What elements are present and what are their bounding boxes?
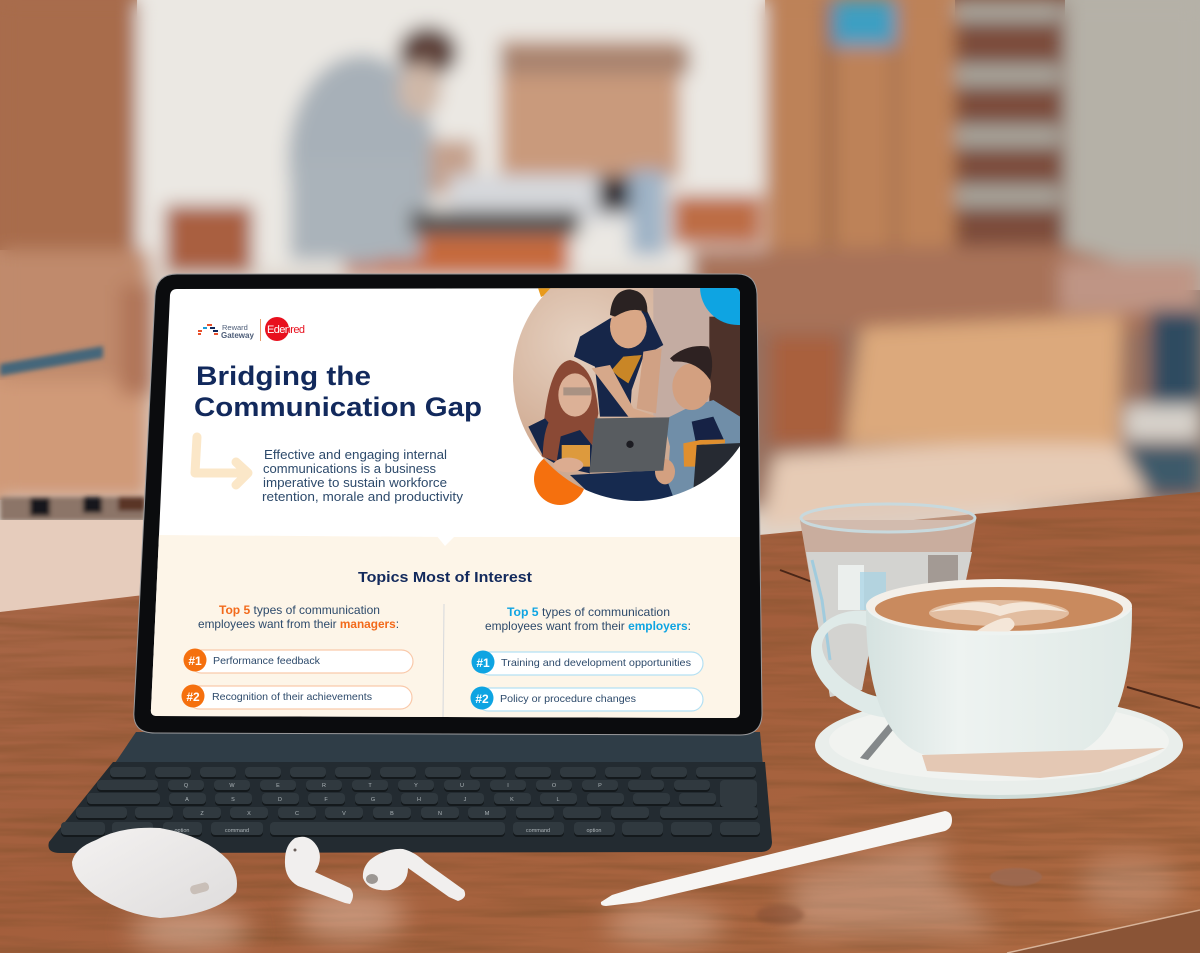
keys: Y: [414, 783, 418, 789]
intro text: [262, 447, 464, 504]
coffee cup: [811, 579, 1132, 760]
cup handle: [811, 611, 892, 718]
keys: E: [276, 783, 280, 789]
keys: X: [247, 811, 251, 817]
cup front lip: [866, 606, 1132, 635]
title: Bridging the: [196, 361, 371, 391]
logo: Reward Gateway and Edenred: [198, 317, 305, 341]
keys: H: [417, 797, 421, 803]
airpods case: [72, 828, 237, 918]
keys: K: [510, 797, 514, 803]
divider: [443, 604, 444, 718]
keys: command: [225, 828, 249, 834]
keys: option: [586, 828, 602, 834]
background: blurred cafe interior: [0, 0, 1200, 640]
keys: U: [460, 783, 464, 789]
cup body: [866, 608, 1132, 760]
photo of three colleagues in circle: [510, 287, 750, 507]
keys: R: [322, 783, 326, 789]
logo: Reward Gateway and Edenred: Edenred: [267, 324, 305, 336]
right column intro: Top 5 types of communication: [507, 605, 670, 619]
manager item 1: [184, 648, 413, 673]
spoon: [860, 720, 898, 760]
manager item 1: #1: [188, 654, 202, 668]
keys: option: [174, 828, 190, 834]
keys: G: [371, 797, 375, 803]
orange circle: [534, 458, 584, 505]
title: [194, 361, 482, 422]
intro text: retention, morale and productivity: [262, 489, 464, 504]
keys: Q: [184, 783, 189, 789]
keys: W: [229, 783, 235, 789]
right earbud: [363, 849, 465, 901]
right column intro: employees want from their employers:: [485, 619, 691, 633]
arrow: [195, 437, 248, 485]
title: Communication Gap: [194, 392, 482, 422]
keyboard cover flap: [113, 732, 763, 766]
intro text: imperative to sustain workforce: [263, 475, 447, 490]
keys: T: [368, 783, 372, 789]
manager item 2: [182, 684, 412, 709]
charging port: [189, 882, 210, 895]
employer item 2: Policy or procedure changes: [500, 693, 636, 705]
left earbud: [285, 837, 353, 904]
keys: [61, 767, 760, 835]
employer item 1: [472, 650, 703, 675]
saucer: [815, 695, 1183, 799]
logo: Reward Gateway and Edenred: Gateway: [221, 331, 254, 340]
keys: O: [552, 783, 557, 789]
section notch: [438, 537, 454, 546]
orange fleck behind photo: [538, 288, 560, 297]
employer item 2: #2: [475, 692, 489, 706]
intro text: communications is a business: [263, 461, 436, 476]
keys: P: [598, 783, 602, 789]
tablet: [134, 249, 776, 735]
keys: F: [324, 797, 328, 803]
manager item 1: Performance feedback: [213, 655, 321, 667]
left foreground chair band: [0, 346, 145, 521]
apple pencil: [601, 811, 952, 906]
tablet bezel: [134, 274, 762, 735]
keys: J: [464, 797, 467, 803]
keys: L: [556, 797, 560, 803]
logo: Reward Gateway and Edenred: Edenred: [267, 324, 305, 336]
intro text: Effective and engaging internal: [264, 447, 447, 462]
keys: B: [390, 811, 394, 817]
left column intro: [198, 606, 398, 630]
keys: S: [231, 797, 235, 803]
right column intro: [486, 608, 690, 632]
employer item 1: Training and development opportunities: [501, 657, 691, 669]
manager item 2: #2: [186, 690, 200, 704]
left column intro: Top 5 types of communication: [219, 603, 380, 617]
keys: I: [507, 783, 509, 789]
keys: N: [438, 811, 442, 817]
keys: M: [485, 811, 490, 817]
keyboard base: [48, 762, 772, 853]
glass of water: [800, 504, 976, 697]
keys: C: [295, 811, 299, 817]
keys: D: [278, 797, 282, 803]
heading: topics: Topics Most of Interest: [358, 569, 532, 586]
sugar sachets: [922, 748, 1165, 778]
tablet screen: infographic: [150, 288, 740, 718]
left column intro: employees want from their managers:: [198, 617, 399, 631]
latte surface: [875, 587, 1123, 631]
employer item 2: [470, 686, 703, 711]
wooden table: [0, 490, 1200, 953]
keys: Z: [200, 811, 204, 817]
manager item 2: Recognition of their achievements: [212, 691, 372, 703]
logo: Reward Gateway and Edenred: Reward: [222, 323, 248, 332]
ribbed mat corner: [1007, 910, 1200, 953]
keyboard: [48, 732, 772, 853]
employer item 1: #1: [476, 656, 490, 670]
keys: command: [526, 828, 550, 834]
beige topics section: [148, 535, 742, 720]
keys: V: [342, 811, 346, 817]
keys: A: [185, 797, 189, 803]
blue circle: [700, 288, 740, 325]
